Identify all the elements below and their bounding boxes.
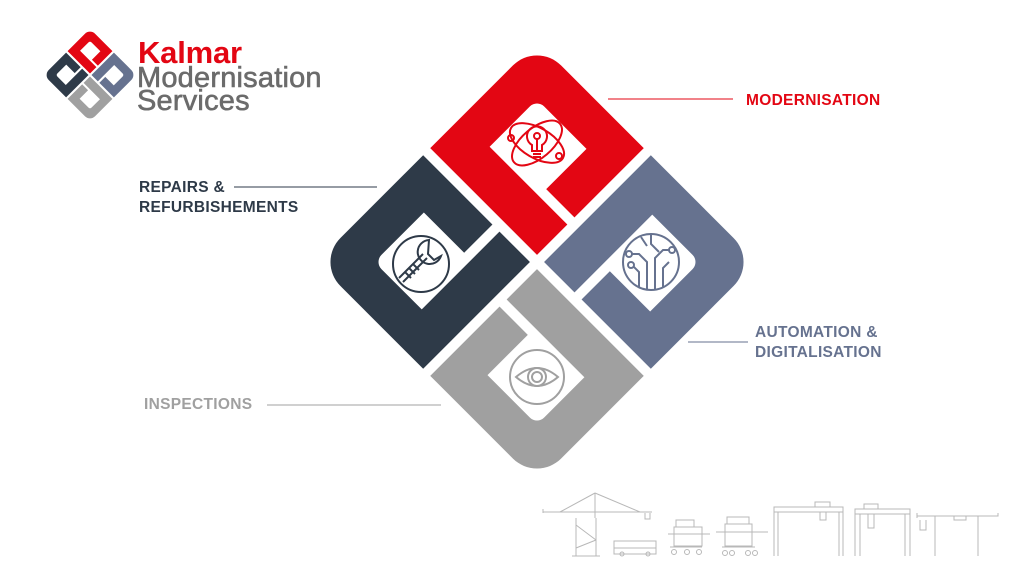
label: automation & digitalisation: AUTOMATION & — [755, 324, 878, 341]
logo text: Services — [137, 85, 250, 117]
piece: repairs (dark) — [316, 154, 531, 369]
piece: modernisation (red) — [430, 41, 645, 256]
icon: circuit — [623, 234, 679, 290]
label: automation & digitalisation — [755, 324, 882, 361]
label: inspections: INSPECTIONS — [144, 396, 252, 413]
icon: atom bulb — [504, 112, 570, 174]
connector lines — [234, 99, 748, 405]
logo text: Kalmar — [138, 35, 242, 70]
label: repairs & refurbishements: REPAIRS & — [139, 179, 225, 196]
logo text — [137, 35, 322, 117]
icon: wrench — [393, 236, 449, 292]
piece: inspections (gray) — [429, 268, 644, 483]
logo: small diamond — [44, 29, 136, 121]
logo text: Modernisation — [137, 62, 322, 94]
label: modernisation: MODERNISATION — [746, 92, 880, 109]
label: automation & digitalisation: DIGITALISATION — [755, 344, 882, 361]
label: repairs & refurbishements: REFURBISHEMENTS — [139, 199, 299, 216]
central diamond — [316, 41, 758, 483]
label: repairs & refurbishements — [139, 179, 299, 216]
icon: eye — [510, 350, 564, 404]
piece: automation (slate blue) — [543, 155, 758, 370]
cranes illustration — [543, 493, 998, 556]
